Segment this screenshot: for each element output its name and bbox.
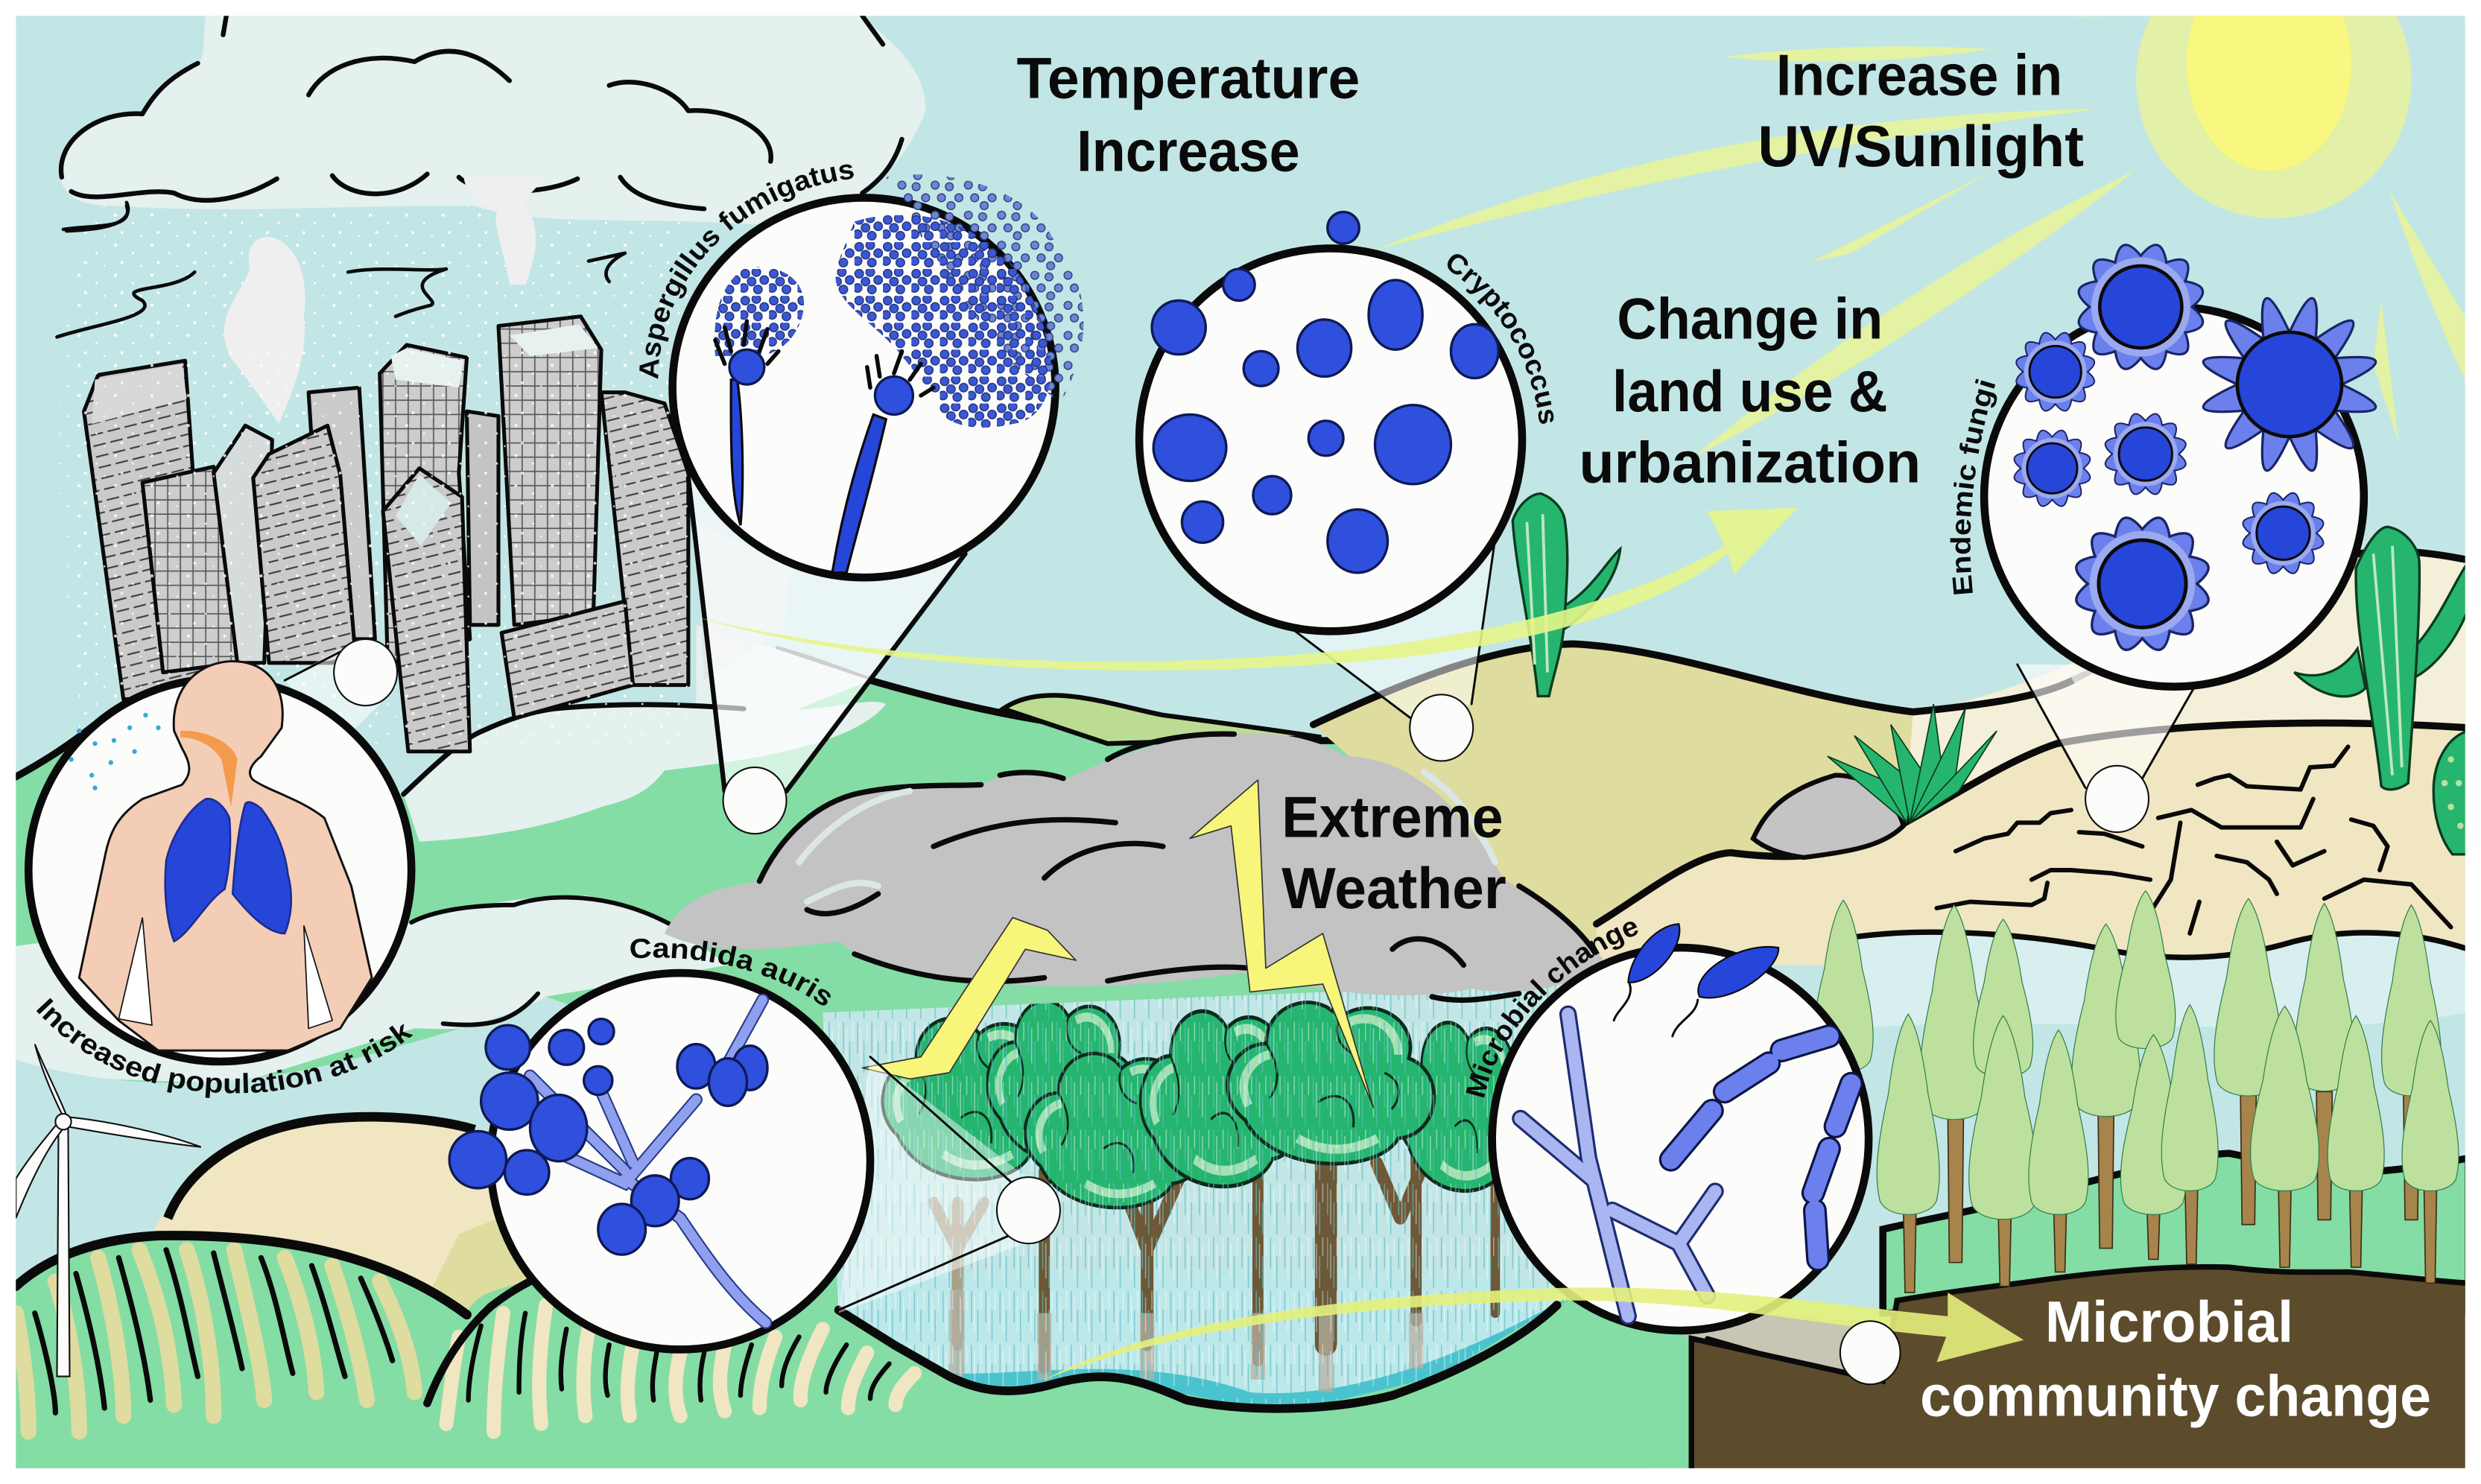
- bottom arrow: [1045, 1287, 2024, 1380]
- lake shallow edge: [949, 1290, 1582, 1424]
- ground outline: [1597, 723, 2468, 924]
- inhaled spores: [69, 713, 161, 790]
- heading: Temperature Increase: Increase: [1077, 119, 1300, 183]
- spore cloud right: [835, 215, 1051, 428]
- lake outline: [839, 1305, 1557, 1409]
- cone: candida: [839, 1057, 1028, 1313]
- bacteria: [1614, 924, 1778, 1036]
- torso: [79, 662, 372, 1050]
- hyphae branches: [1521, 1014, 1715, 1316]
- lower mist outline: [411, 898, 673, 1025]
- yeast budding cells: [449, 1019, 767, 1255]
- small lens: cryptococcus: [1410, 694, 1473, 761]
- lake water: [823, 1270, 1598, 1424]
- sterigmata right: [867, 351, 934, 396]
- spore cloud left: [714, 267, 804, 356]
- cream hill outline: [168, 1117, 475, 1218]
- cone: microbial: [1685, 1310, 1875, 1384]
- magnifier: lungs: [28, 662, 411, 1062]
- small lens: candida: [997, 1177, 1060, 1243]
- spherule left: [2015, 431, 2090, 507]
- conidiophore right: [832, 414, 886, 573]
- hyphae: [530, 1000, 766, 1322]
- sun: [2136, 0, 2412, 218]
- haze specks: [60, 197, 696, 696]
- spherule upper left: [2016, 333, 2094, 411]
- cactus right: [2294, 527, 2468, 790]
- left lung: [165, 799, 230, 942]
- forest ridge outline: [1857, 932, 2468, 957]
- spore cloud outer: [886, 174, 1083, 404]
- label: Increased population at risk: Increased population at risk: [36, 998, 413, 1098]
- heading: Temperature Increase: Temperature: [1017, 47, 1360, 111]
- sand hill outline: [1314, 551, 2468, 725]
- label: Candida auris: Candida auris: [630, 939, 831, 1006]
- magnifier: aspergillus: [673, 174, 1083, 577]
- magnifier: microbial change: [1492, 924, 1869, 1331]
- cactus left: [1512, 494, 1620, 696]
- heading: Change in land use & urbanization: land use &: [1612, 360, 1888, 424]
- specks over city: [79, 348, 696, 743]
- reflections: [957, 1290, 1416, 1392]
- spherule lower: [2076, 518, 2208, 650]
- heading: Change in land use & urbanization: Change in: [1617, 287, 1883, 351]
- sand bank: [419, 1202, 570, 1329]
- heading: Extreme Weather: Weather: [1281, 857, 1506, 921]
- heading: Increase in UV/Sunlight: UV/Sunlight: [1758, 115, 2084, 179]
- big arrow: change in land use: [696, 508, 1798, 670]
- forest meadow: [1883, 1153, 2468, 1313]
- small lens: endemic fungi: [2085, 766, 2149, 832]
- spherule large: [2203, 298, 2376, 471]
- cone: lungs: [285, 649, 380, 743]
- left lower sky: [16, 997, 680, 1290]
- meadow ridge outline: [16, 1235, 467, 1315]
- cypress trees: [1813, 891, 2459, 1220]
- magnifier: endemic fungi: [1984, 245, 2376, 687]
- arm gaps: [118, 918, 332, 1028]
- cone: aspergillus: [688, 478, 965, 791]
- heading: Increase in UV/Sunlight: Increase in: [1776, 43, 2062, 107]
- cell chains: [1671, 1036, 1851, 1259]
- foreground meadow: [16, 1235, 1691, 1471]
- meadow strokes left: [35, 1250, 393, 1412]
- sterigmata left: [715, 321, 779, 364]
- rock: [1753, 776, 1904, 857]
- airway: [180, 731, 238, 807]
- heading: Extreme Weather: Extreme: [1281, 785, 1504, 849]
- skyline: [82, 314, 709, 754]
- spherule lower right: [2243, 493, 2323, 574]
- upper mist: [404, 702, 886, 842]
- spherule center: [2105, 413, 2186, 494]
- small lens: aspergillus: [723, 767, 787, 834]
- meadow stripes right: [446, 1305, 915, 1432]
- rain: [823, 949, 1614, 1424]
- heading: Increase in UV/Sunlight: [1758, 43, 2084, 179]
- yeast cells: [1152, 212, 1498, 573]
- green hill: [16, 680, 1646, 1471]
- label: Cryptococcus: Cryptococcus: [1447, 254, 1554, 424]
- lower left mist: [16, 895, 728, 1084]
- cypress trunks: [1904, 1091, 2436, 1293]
- grass tuft: [1828, 704, 1997, 822]
- meadow stripes left: [16, 1250, 414, 1432]
- heading: Microbial community change: community change: [1920, 1365, 2431, 1429]
- lightning bolts: [862, 780, 1373, 1108]
- label: Endemic fungi: Endemic fungi: [1951, 378, 1997, 594]
- forest backdrop: [1857, 932, 2468, 1266]
- heading: Microbial community change: [1920, 1290, 2431, 1429]
- small lens: microbial log: [1840, 1321, 1901, 1384]
- cones outlines: [688, 478, 1851, 1380]
- cone: endemic fungi: [2018, 665, 2208, 791]
- top cloud: [60, 16, 925, 228]
- spherule top: [2079, 245, 2203, 369]
- second ridge: [427, 1274, 546, 1404]
- heading: Microbial community change: Microbial: [2045, 1290, 2293, 1354]
- label: Aspergillus fumigatus: Aspergillus fumigatus: [639, 164, 854, 379]
- magnifier: cryptococcus: [1139, 212, 1522, 631]
- dry cracked ground: [1597, 723, 2468, 965]
- lake and flooded forest: [823, 949, 1614, 1424]
- back pale hill: [1003, 695, 1321, 743]
- storm cloud: [665, 733, 1606, 1000]
- magnifier: candida auris: [449, 973, 870, 1349]
- pale fade behind city: [696, 625, 870, 712]
- sun rays: [1375, 16, 2465, 459]
- tree canopies: [882, 1001, 1528, 1208]
- cream hill: [150, 1117, 522, 1321]
- heading: Change in land use & urbanization: urbanization: [1579, 431, 1921, 495]
- wind turbine: [16, 1044, 201, 1377]
- hill outline: [16, 680, 1345, 777]
- mist outline: [404, 705, 744, 794]
- tree trunks: [934, 1139, 1495, 1369]
- brown soil: [1691, 1267, 2468, 1471]
- label: Microbial change: Microbial change: [1466, 922, 1638, 1098]
- back sand hill: [1314, 552, 2468, 949]
- heading: Temperature Increase: [1017, 47, 1360, 183]
- smoke plumes: [224, 177, 546, 424]
- right lung: [232, 802, 291, 933]
- pale cream slope: [1905, 552, 2468, 822]
- ground cracks: [1936, 746, 2451, 933]
- small lens: lungs: [334, 639, 397, 705]
- conidiophore left: [731, 380, 743, 525]
- heading: Change in land use & urbanization: [1579, 287, 1921, 495]
- wind wisps: [57, 203, 625, 337]
- cone: cryptococcus: [1266, 538, 1495, 720]
- small dotted cactus: [2433, 731, 2468, 854]
- forest sky band: [1857, 1012, 2468, 1266]
- meadow strokes right: [469, 1313, 890, 1400]
- heading: Extreme Weather: [1281, 785, 1506, 921]
